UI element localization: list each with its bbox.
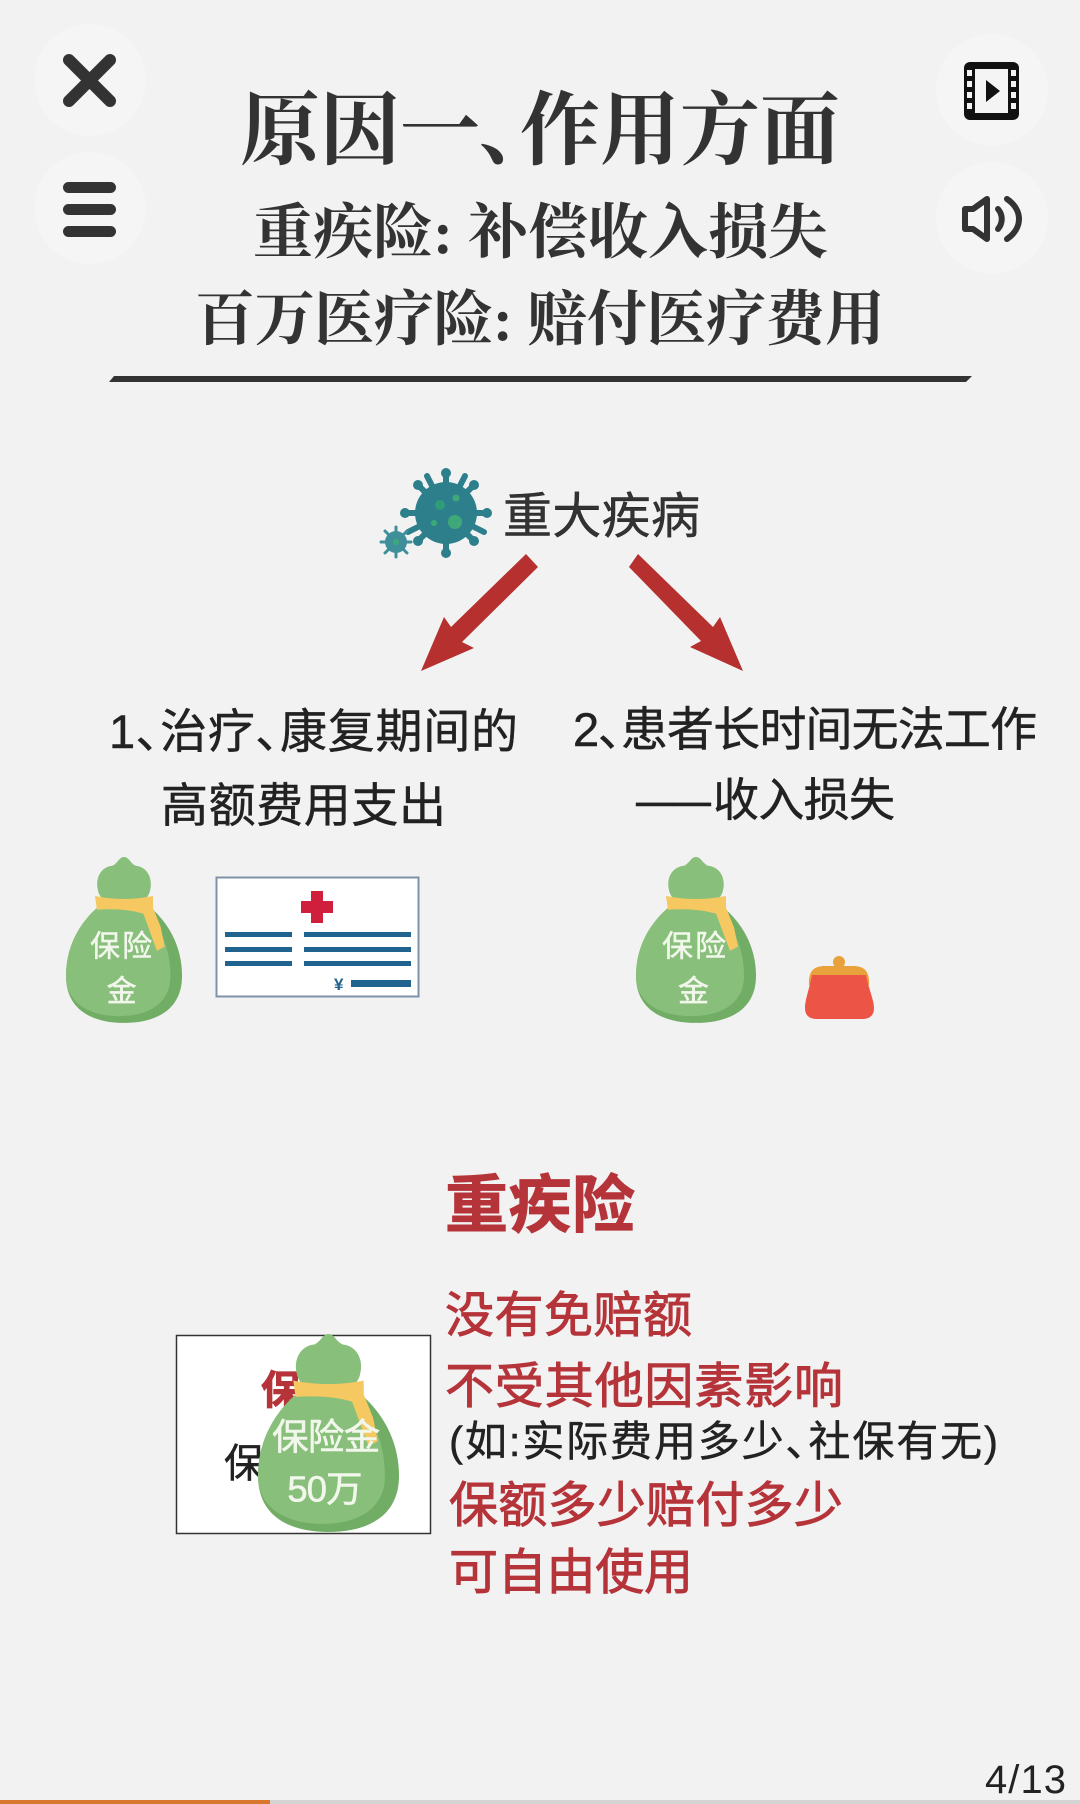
panel: policy card with bag: 保 (261, 1369, 301, 1413)
icon: money bag left: 金 (107, 975, 137, 1008)
icon: large money bag: 50万 (287, 1469, 363, 1510)
icon: money bag right: 金 (678, 975, 709, 1008)
icon: money bag left (66, 857, 182, 1023)
icon: large money bag: 保险金 (272, 1416, 380, 1457)
heading: critical illness insurance: 重疾险 (445, 1171, 635, 1241)
subtitle: critical illness insurance: 重疾险: 补偿收入损失 (253, 200, 828, 266)
text: point two: —— (636, 774, 711, 826)
icon: medical bill (216, 878, 418, 996)
icon: menu button (34, 152, 146, 264)
subtitle: medical insurance: 百万医疗险: 赔付医疗费用 (195, 287, 885, 353)
icon: money bag right: 保险 (662, 930, 726, 963)
arrow: to treatment costs (421, 554, 538, 671)
panel: policy card with bag: 保 (224, 1442, 264, 1486)
icon: close button (34, 24, 146, 136)
text: no deductible: 没有免赔额 (445, 1289, 692, 1343)
progress bar (0, 1800, 1080, 1804)
text: unaffected by other factors: 不受其他因素影响 (445, 1360, 843, 1414)
text: pay by sum insured: 保额多少赔付多少 (449, 1479, 843, 1533)
icon: money bag right (636, 857, 756, 1023)
icon: video button (936, 34, 1048, 146)
icon: empty wallet (805, 956, 874, 1019)
text: point two: 2、患者长时间无法工作 (573, 703, 1037, 756)
page counter: 4/13 (985, 1758, 1066, 1802)
arrow: to income loss (629, 554, 743, 671)
icon: medical bill: ¥ (334, 975, 344, 994)
text: free to use: 可自由使用 (449, 1546, 693, 1600)
panel: policy card with bag (176, 1334, 430, 1534)
text: point one: 1、治疗、康复期间的 (109, 705, 518, 758)
icon: sound button (936, 162, 1048, 274)
text: examples note: (如:实际费用多少、社保有无) (449, 1418, 998, 1465)
text: point one (109, 705, 518, 832)
icon: virus (381, 468, 492, 558)
title divider (109, 376, 972, 382)
icon: large money bag (258, 1334, 399, 1532)
text: point one: 高额费用支出 (161, 779, 446, 832)
text: point two (573, 703, 1037, 826)
icon: money bag left: 保险 (90, 930, 152, 964)
text: point two: 收入损失 (713, 774, 895, 826)
heading: major illness: 重大疾病 (503, 490, 700, 544)
title: 原因一、作用方面 (240, 88, 840, 176)
